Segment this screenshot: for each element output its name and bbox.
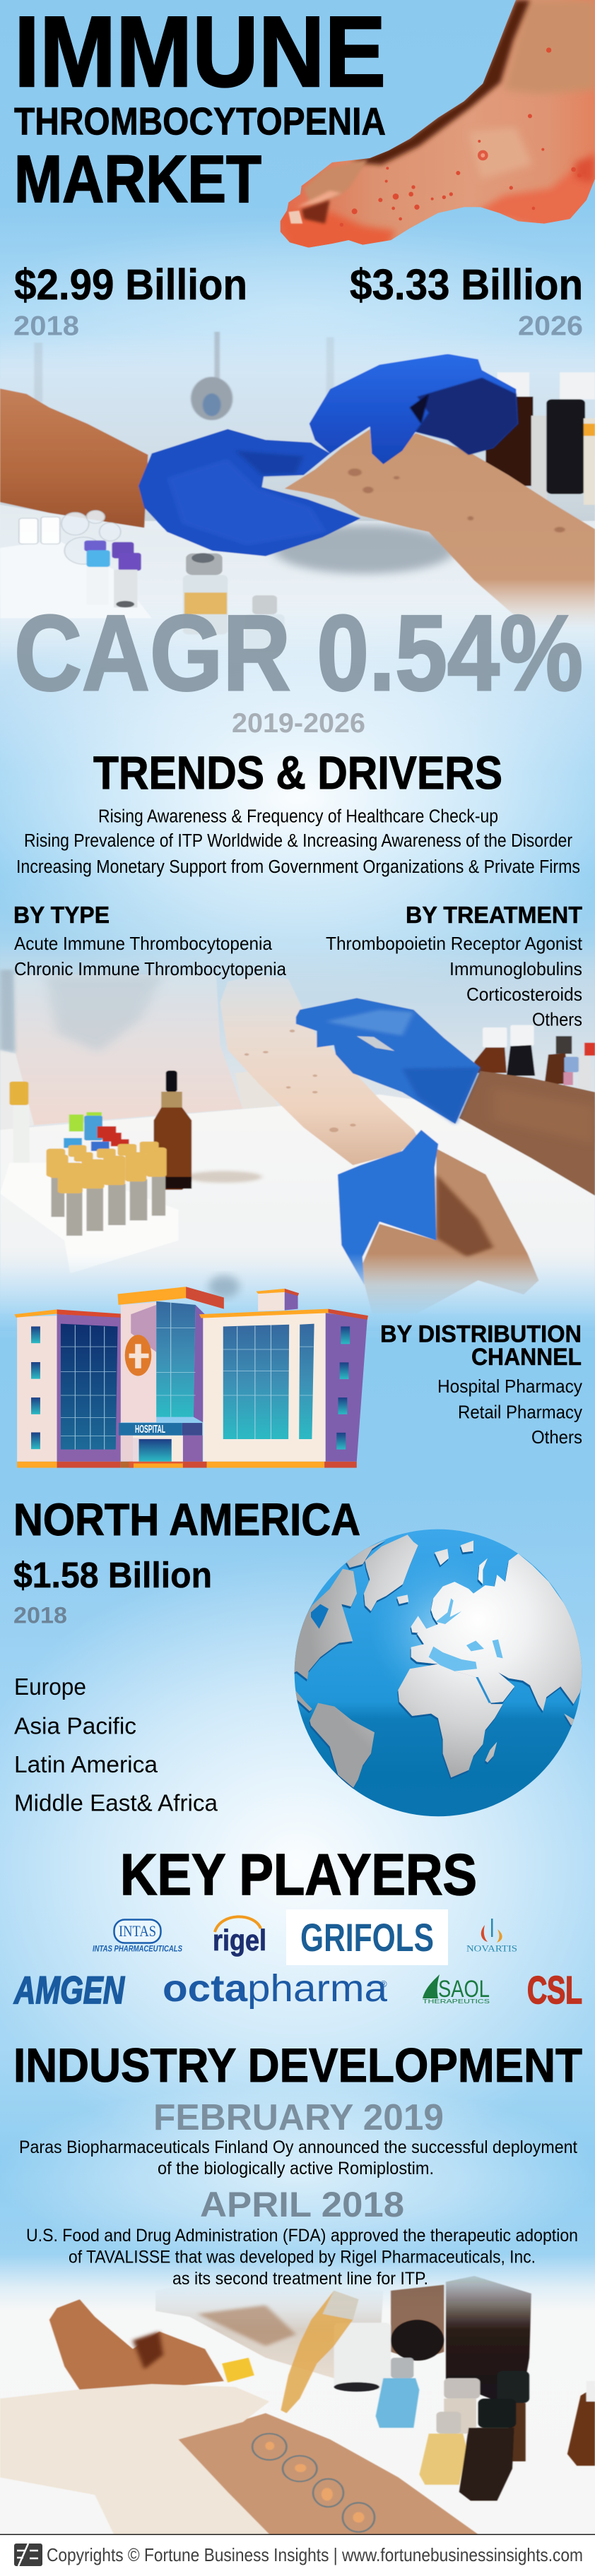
Franz Josef xyxy=(461,1541,473,1552)
market value 2026 xyxy=(350,261,583,342)
yellow cap xyxy=(222,2358,254,2383)
logo: Amgen: AMGEN xyxy=(13,1968,125,2012)
Iceland xyxy=(397,1594,408,1604)
photo: skin allergy test xyxy=(0,2276,595,2534)
bottles on right xyxy=(474,1025,595,1090)
table xyxy=(0,505,595,667)
South East Asia xyxy=(564,1714,576,1725)
vials xyxy=(183,553,285,652)
patient hand xyxy=(360,1149,539,1313)
by distribution channel: Others xyxy=(531,1426,582,1448)
logo: Saol xyxy=(423,1974,490,2005)
Novaya Zemlya xyxy=(478,1558,488,1584)
wall xyxy=(0,941,595,1144)
upper blue glove xyxy=(296,998,480,1124)
table shadow xyxy=(273,525,455,573)
brown bottle xyxy=(391,2285,444,2361)
other regions: Europe xyxy=(14,1674,86,1700)
development: April 2018: as its second treatment line for ITP. xyxy=(172,2269,428,2289)
by distribution channel: Retail Pharmacy xyxy=(458,1401,582,1422)
title xyxy=(14,0,386,217)
logo: Novartis xyxy=(466,1919,517,1953)
white bottle xyxy=(334,2322,391,2390)
Africa xyxy=(398,1664,503,1777)
other regions xyxy=(14,1674,218,1816)
logo: Saol: SAOL xyxy=(438,1976,490,2003)
photo: foot with rash xyxy=(269,0,595,254)
north america: $1.58 Billion xyxy=(13,1555,212,1595)
by treatment: BY TREATMENT xyxy=(406,902,583,929)
patient arm xyxy=(220,974,418,1165)
tall test tube xyxy=(9,1082,29,1164)
logo: Octapharma: ® xyxy=(380,1979,387,1989)
north america xyxy=(13,1494,360,1628)
other regions: Asia Pacific xyxy=(14,1713,136,1739)
logo: Intas xyxy=(93,1919,182,1953)
Svalbard xyxy=(435,1549,449,1566)
doctor arm xyxy=(0,388,148,527)
icon: Fortune Business Insights logo xyxy=(14,2544,42,2566)
stethoscope xyxy=(34,332,334,420)
by distribution channel: Hospital Pharmacy xyxy=(437,1376,582,1397)
Britain xyxy=(411,1616,426,1633)
by treatment: Immunoglobulins xyxy=(449,958,582,979)
other regions: Latin America xyxy=(14,1751,158,1777)
blue glove lower hand xyxy=(139,429,360,556)
logo: Intas: INTAS xyxy=(119,1922,156,1940)
development: February 2019 xyxy=(19,2097,577,2178)
fade below photo xyxy=(0,1253,595,1331)
by distribution channel: BY DISTRIBUTION xyxy=(380,1320,582,1347)
Greenland xyxy=(364,1534,418,1611)
logo: Saol: THERAPEUTICS xyxy=(423,1998,490,2005)
rack with sample tubes xyxy=(0,511,152,619)
Madagascar xyxy=(485,1742,497,1763)
forearm xyxy=(178,2413,478,2534)
north america: 2018 xyxy=(13,1603,67,1628)
by treatment: Others xyxy=(532,1008,582,1030)
development: April 2018: APRIL 2018 xyxy=(200,2185,404,2224)
hospital sign: HOSPITAL xyxy=(135,1424,165,1436)
by treatment xyxy=(326,902,583,1030)
north america: NORTH AMERICA xyxy=(13,1494,360,1545)
amber ampoule xyxy=(281,2291,358,2413)
cream glove xyxy=(0,2384,269,2534)
development: February 2019: of the biologically active Romiplostim. xyxy=(158,2159,434,2178)
market value 2026: 2026 xyxy=(518,311,583,342)
photo: arm examination with test tubes xyxy=(0,941,595,1313)
table xyxy=(0,1095,595,1313)
trends and drivers: Rising Awareness & Frequency of Healthcare Check-up xyxy=(98,806,498,826)
title: THROMBOCYTOPENIA xyxy=(14,100,386,143)
trends and drivers xyxy=(16,746,580,877)
logo: Octapharma: octapharma xyxy=(163,1967,388,2010)
development: April 2018: of TAVALISSE that was developed by Rigel Pharmaceuticals, Inc. xyxy=(69,2247,536,2267)
ghost gloved hand with ampoule xyxy=(155,2282,383,2378)
lower blue glove xyxy=(338,1130,438,1285)
icon: globe xyxy=(292,1530,585,1816)
dark bottle xyxy=(446,2276,531,2410)
by treatment: Thrombopoietin Receptor Agonist xyxy=(326,933,583,954)
CAGR: 2019-2026 xyxy=(232,708,365,739)
footer xyxy=(0,2534,595,2576)
logo: Rigel: rigel xyxy=(213,1924,266,1957)
doctor forearm xyxy=(459,1071,595,1195)
by distribution channel xyxy=(380,1320,582,1448)
Central America xyxy=(292,1686,312,1711)
development: April 2018 xyxy=(26,2185,578,2289)
vials and dark bottles xyxy=(419,2371,595,2500)
logo: Grifols: GRIFOLS xyxy=(300,1915,434,1960)
market value 2018: 2018 xyxy=(13,311,79,342)
blue vial xyxy=(376,2358,419,2428)
by type xyxy=(13,902,287,979)
by distribution channel: CHANNEL xyxy=(471,1344,582,1371)
icon: hospital building xyxy=(14,1287,368,1468)
by type: Chronic Immune Thrombocytopenia xyxy=(14,958,287,979)
blue glove upper hand xyxy=(310,354,518,464)
blurred dark spot xyxy=(208,1275,240,1298)
by treatment: Corticosteroids xyxy=(466,984,582,1005)
trends and drivers: TRENDS & DRIVERS xyxy=(93,746,502,799)
test tube rack xyxy=(0,1112,178,1273)
market value 2018 xyxy=(13,261,247,342)
title: MARKET xyxy=(14,142,261,217)
logo: Grifols xyxy=(286,1909,448,1965)
bottles xyxy=(485,372,595,505)
logo: Intas: INTAS PHARMACEUTICALS xyxy=(93,1943,182,1953)
Europe and Asia xyxy=(411,1554,585,1711)
patient arm xyxy=(285,429,595,629)
dropper bottle xyxy=(153,1071,192,1190)
patient blouse xyxy=(13,974,243,1125)
doctor coat xyxy=(0,332,595,521)
logo: Novartis: NOVARTIS xyxy=(466,1943,517,1953)
photo: doctor examining hand xyxy=(0,332,595,667)
other regions: Middle East& Africa xyxy=(14,1789,218,1816)
by type: Acute Immune Thrombocytopenia xyxy=(14,933,272,954)
by type: BY TYPE xyxy=(13,902,110,929)
market value 2026: $3.33 Billion xyxy=(350,261,583,309)
South America xyxy=(310,1703,375,1788)
patient hand palm xyxy=(49,2299,224,2396)
development: February 2019: FEBRUARY 2019 xyxy=(153,2097,444,2138)
market value 2018: $2.99 Billion xyxy=(14,261,247,309)
key players heading: KEY PLAYERS xyxy=(120,1842,477,1907)
skin test circles xyxy=(252,2433,375,2532)
North America xyxy=(292,1569,357,1679)
